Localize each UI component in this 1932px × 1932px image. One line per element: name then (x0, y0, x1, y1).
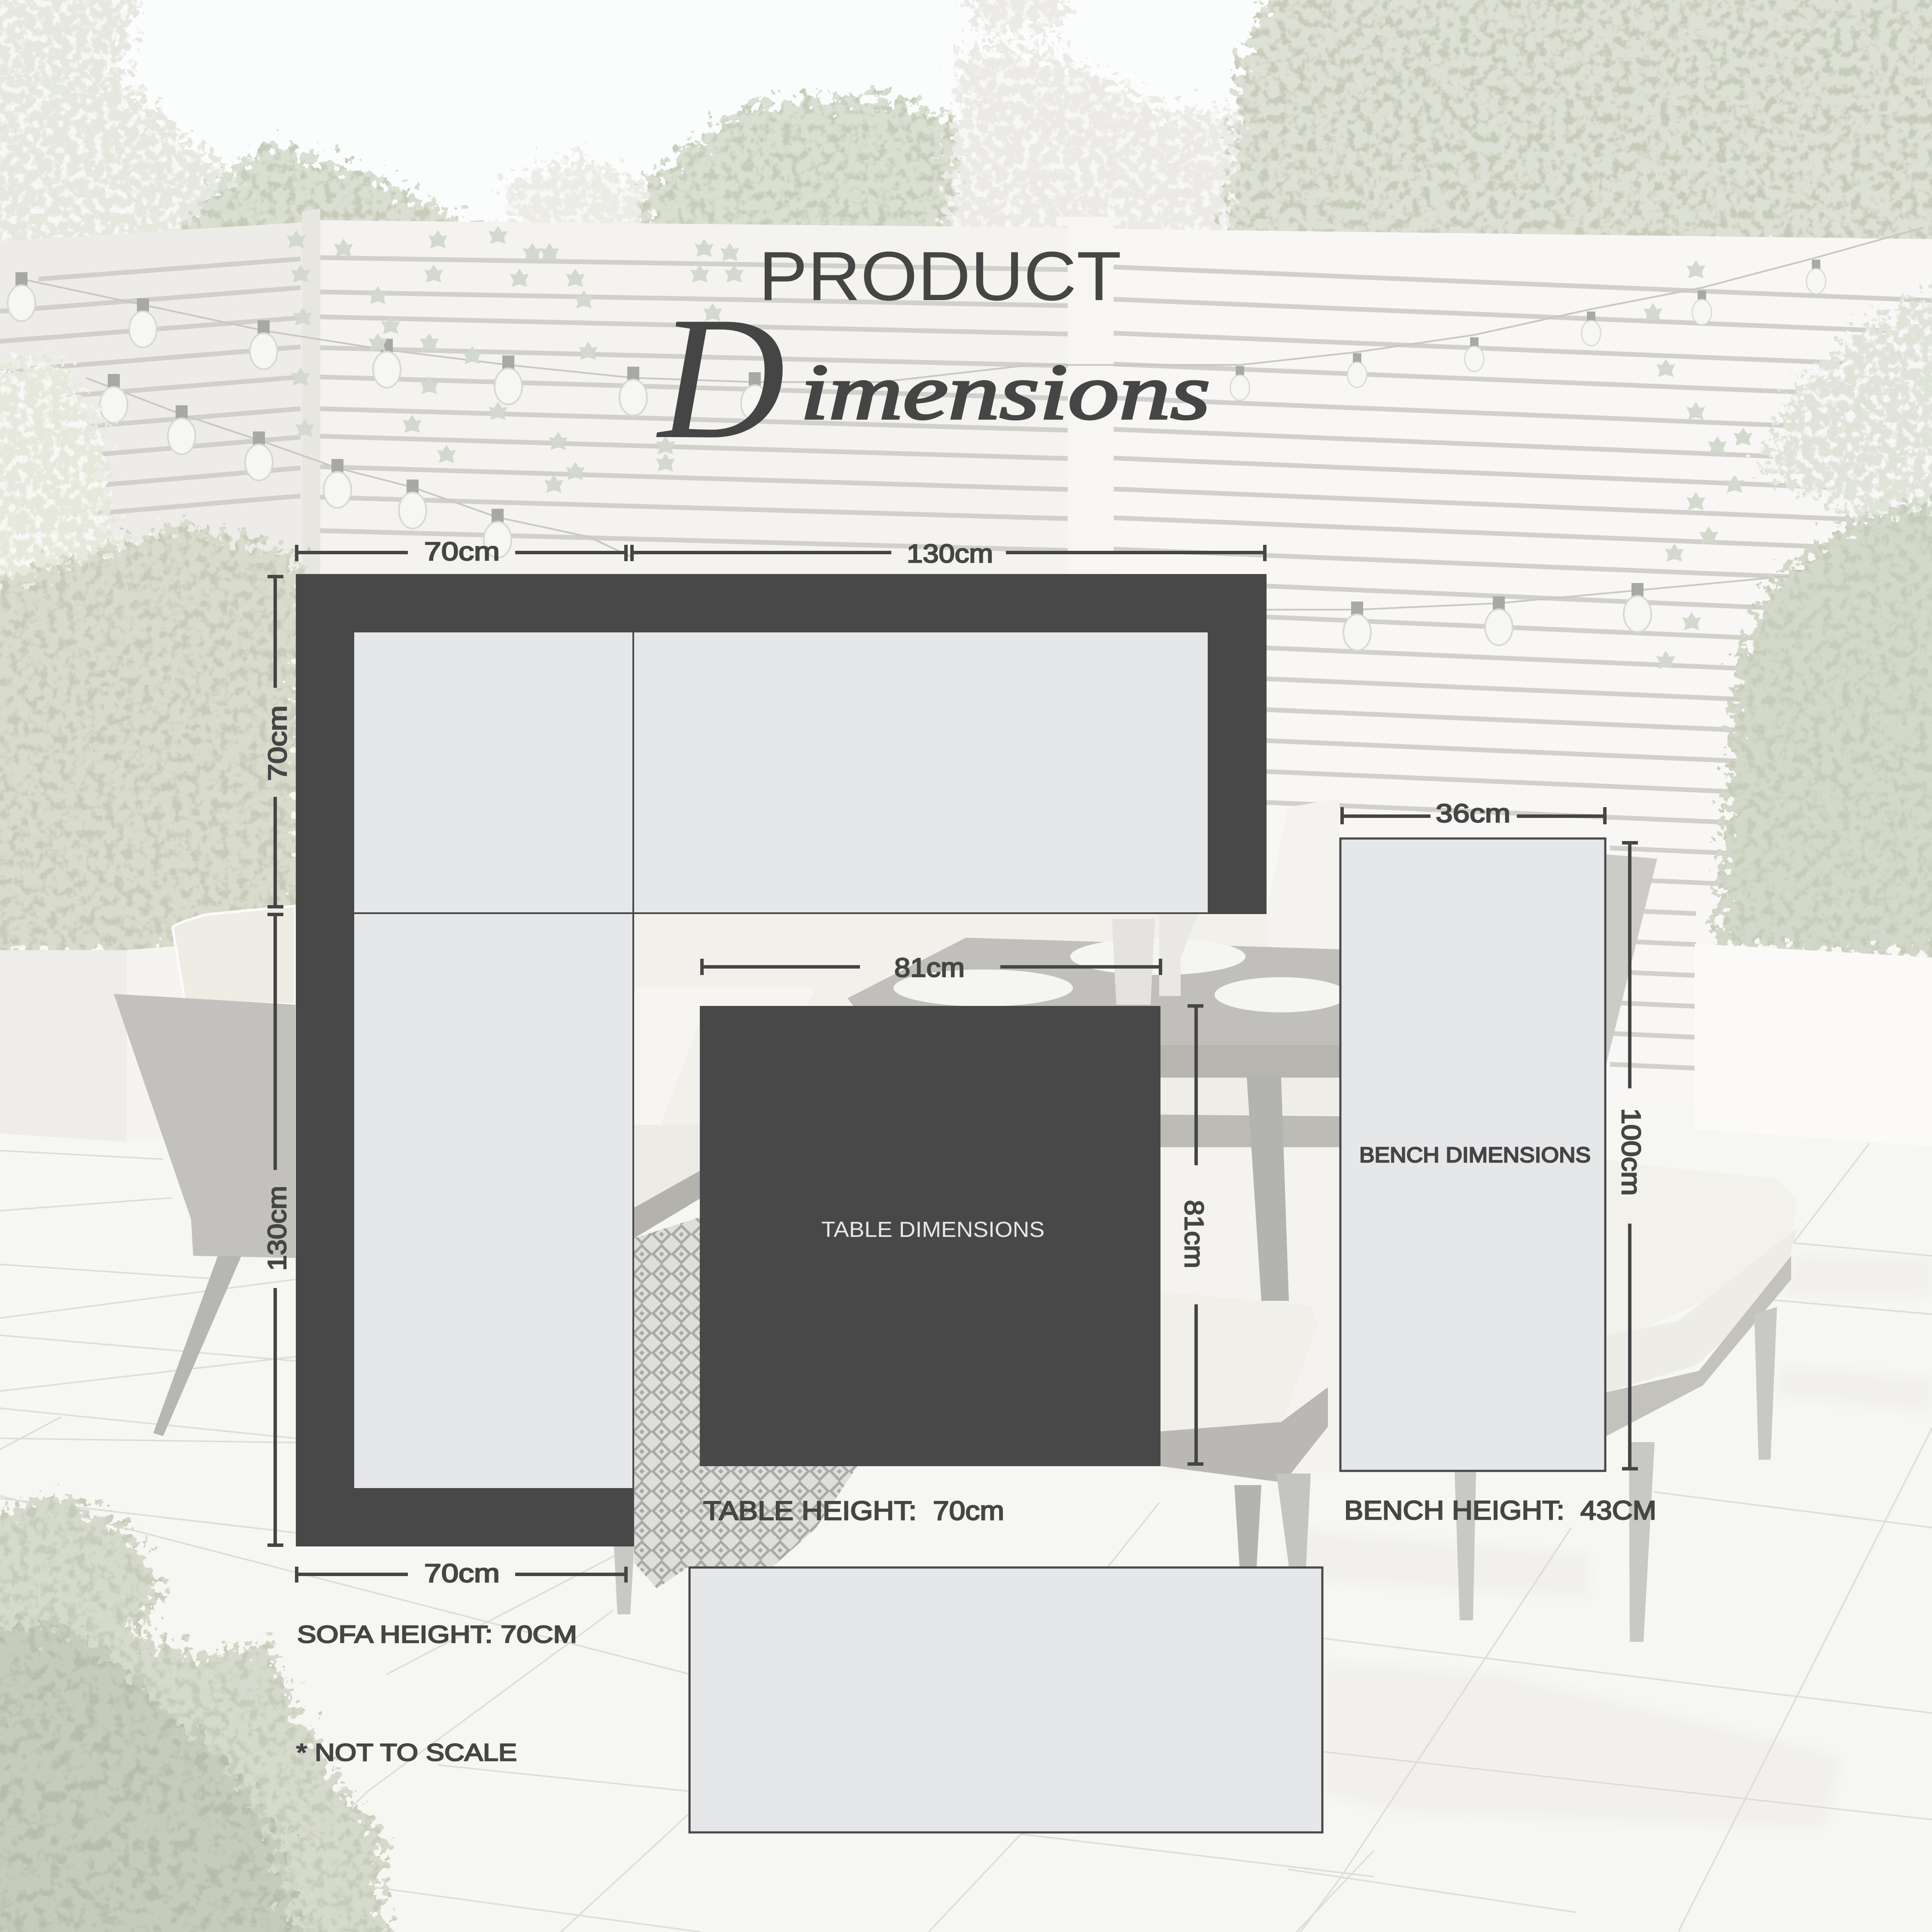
dimension: sofa left 130cm (263, 914, 292, 1545)
sofa leg (614, 1546, 634, 1614)
bamboo above the fence (172, 94, 970, 258)
dimension: bench length 100cm (1616, 843, 1646, 1469)
bush behind the sofa on the left (0, 524, 301, 957)
note: not to scale: * NOT TO SCALE (296, 1739, 517, 1766)
dimension: sofa left 70cm: 70cm (263, 705, 292, 781)
patterned throw (634, 1217, 857, 1589)
label: bench height: BENCH HEIGHT: 43CM (1344, 1496, 1656, 1525)
sofa short seat (354, 914, 633, 1488)
fence slats middle (320, 258, 1068, 550)
fence right panel (1114, 229, 1932, 1159)
fence slats left (0, 259, 301, 522)
dimension: sofa top 70cm: 70cm (424, 537, 500, 566)
left armchair wicker (114, 994, 295, 1258)
right bench wicker back (1606, 854, 1657, 1065)
fence posts (302, 209, 320, 601)
label: table height: TABLE HEIGHT: 70cm (703, 1496, 1004, 1526)
left armchair cushion (173, 906, 295, 1005)
dimension: table depth 81cm: 81cm (1179, 1200, 1209, 1268)
planter left (0, 950, 127, 1142)
floor shadow bands (1288, 1254, 1932, 1829)
table diagram (700, 1006, 1160, 1466)
table label: TABLE DIMENSIONS (821, 1217, 1045, 1242)
right bench cushion (1606, 1159, 1797, 1344)
label: sofa height: SOFA HEIGHT: 70CM (297, 1621, 577, 1648)
string lights wire (21, 228, 1932, 610)
planter right (1695, 944, 1932, 1146)
dimension: bench width 36cm: 36cm (1436, 799, 1510, 828)
right bench wicker (1606, 1256, 1791, 1436)
second bench diagram (690, 1567, 1322, 1832)
front bench wicker (1160, 1387, 1328, 1482)
dimension: sofa top 130cm: 130cm (907, 539, 993, 568)
large tree top right (1224, 0, 1932, 258)
table edge wicker (1160, 1045, 1340, 1078)
dimension: table width 81cm (702, 953, 1160, 983)
dimension: sofa left 130cm: 130cm (263, 1186, 292, 1271)
floor tile joints (0, 1143, 1932, 1932)
ivy leaves on the fence (287, 226, 1753, 669)
title: PRODUCT: PRODUCT (759, 237, 1121, 315)
string light bulbs (8, 260, 1826, 650)
sky (0, 0, 1932, 266)
fence slats right (1114, 267, 1932, 1068)
pale bamboo grass far left (0, 352, 185, 601)
dimension: sofa bottom 70cm (297, 1559, 626, 1588)
front bench cushion (1160, 1292, 1318, 1431)
laurel shrub lower right (1713, 494, 1932, 957)
fence middle panel (320, 220, 1068, 601)
dimension: sofa left 70cm (263, 577, 292, 907)
tree canopy left (0, 0, 653, 275)
sofa long seat (634, 632, 1208, 913)
bench label: BENCH DIMENSIONS (1359, 1143, 1591, 1167)
bench diagram (1340, 838, 1605, 1471)
dimension: bench width 36cm (1342, 799, 1605, 828)
right bench legs (1754, 1307, 1777, 1460)
dimension: sofa bottom 70cm: 70cm (424, 1559, 500, 1588)
floor left (0, 1073, 1932, 1932)
sofa behind table (634, 914, 1340, 1125)
bush bottom left dense core (0, 1623, 301, 1932)
dimension: sofa top 70cm (297, 537, 626, 566)
sofa seat divider lines (354, 632, 1267, 1488)
sofa dark frame (296, 574, 1267, 1546)
blossom tree centre right (945, 0, 1267, 258)
front bench legs (1234, 1485, 1261, 1567)
sofa front wicker (634, 1171, 700, 1238)
title: Dimensions script: imensions (800, 348, 1210, 436)
table top (848, 938, 1340, 1045)
bush bottom left outer leaves (0, 1494, 399, 1932)
plates and glasses (893, 914, 1348, 1012)
dimension: sofa top 130cm (632, 539, 1265, 568)
dimension: table depth 81cm (1179, 1006, 1209, 1464)
sofa diagram (296, 574, 1267, 1546)
sofa corner seat (354, 632, 633, 913)
floor under table (1160, 1147, 1340, 1473)
fence left panel (0, 222, 308, 687)
table leg (1247, 1078, 1289, 1301)
dimension: bench length 100cm: 100cm (1616, 1108, 1646, 1196)
left armchair leg (153, 1256, 241, 1436)
dimension: table width 81cm: 81cm (894, 953, 965, 983)
title: Dimensions script: D (656, 280, 785, 475)
variegated shrub upper right (1760, 283, 1932, 558)
